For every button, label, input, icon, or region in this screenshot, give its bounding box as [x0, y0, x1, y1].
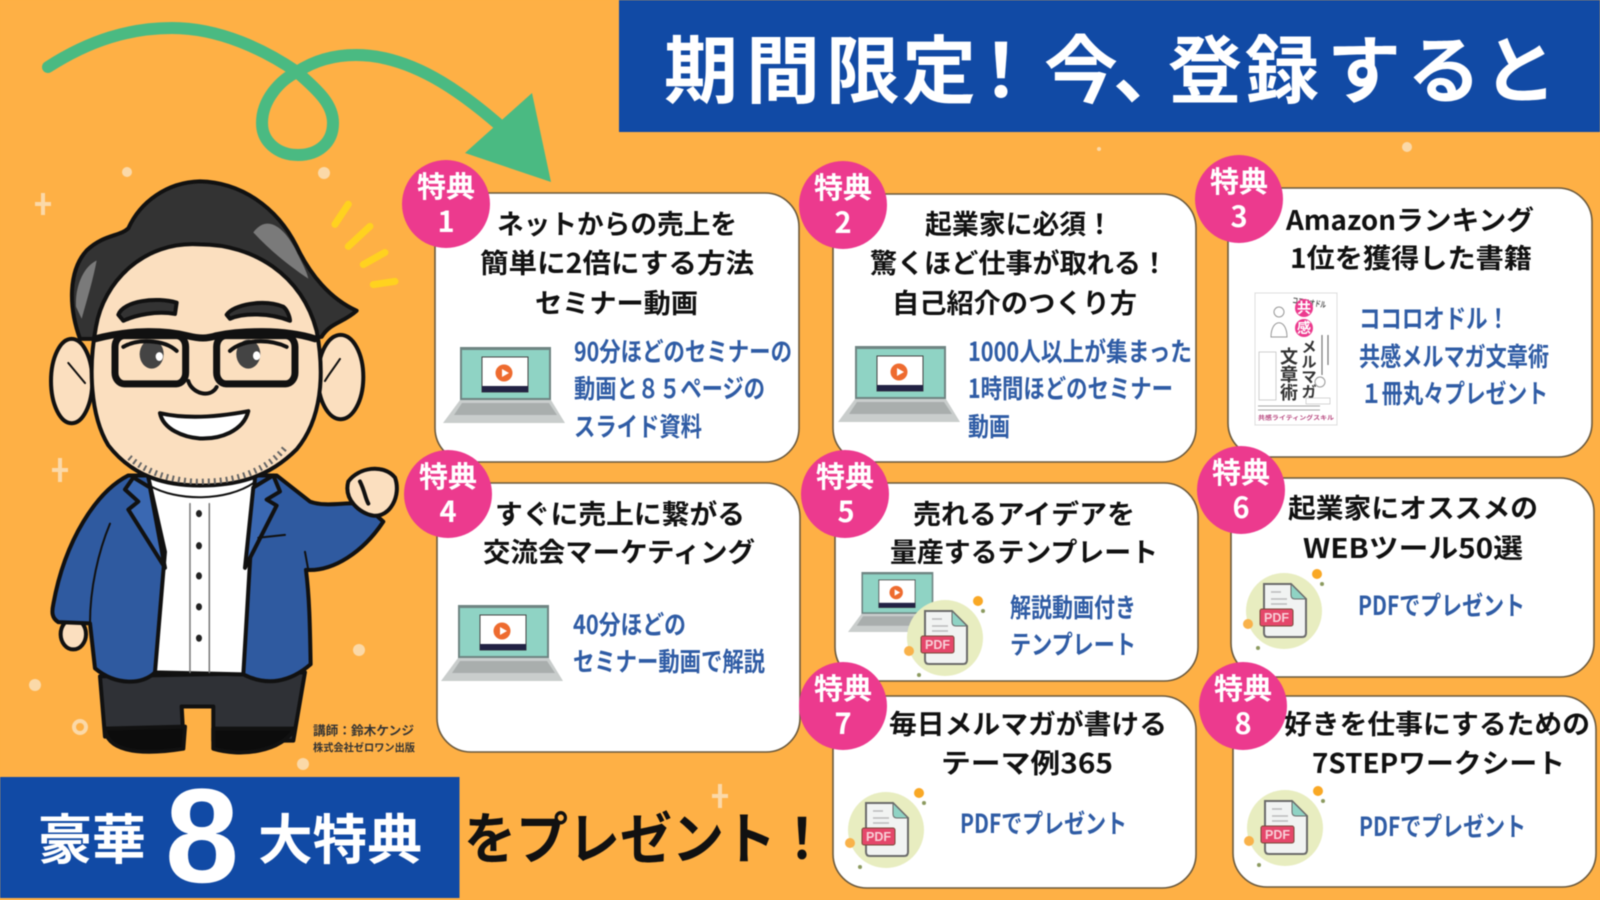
badge 2 — [799, 161, 887, 249]
description: 解説動画付き — [1010, 588, 1136, 625]
description: 1時間ほどのセミナー — [968, 369, 1173, 406]
badge 1 — [402, 160, 490, 248]
heading 8 — [1284, 703, 1590, 781]
heading 6: 起業家にオススメの — [1288, 487, 1538, 526]
heading 5: 売れるアイデアを — [913, 493, 1135, 532]
badge 6: 特典 — [1212, 450, 1270, 492]
badge 7 — [799, 662, 887, 750]
fist — [347, 469, 397, 516]
panel: 特典6 — [1231, 478, 1594, 677]
icon: PDF: PDF — [925, 638, 950, 652]
face — [92, 244, 321, 486]
badge 8 — [1199, 662, 1287, 750]
shirt — [148, 477, 255, 674]
heading 1 — [480, 203, 754, 321]
mouth — [160, 411, 248, 439]
left hand — [61, 619, 86, 649]
icon: PDF: PDF — [1265, 828, 1290, 842]
heading 2 — [870, 203, 1168, 321]
heading 2: 驚くほど仕事が取れる！ — [870, 242, 1168, 281]
description: 40分ほどの — [573, 605, 686, 642]
arrow: curly green arrow — [48, 28, 551, 182]
heading 8: 7STEPワークシート — [1312, 742, 1565, 781]
description: PDFでプレゼント — [960, 804, 1127, 841]
badge 3: 特典 — [1210, 159, 1268, 201]
glasses — [95, 332, 315, 384]
panel: 特典8 — [1233, 696, 1596, 887]
character illustration — [51, 181, 397, 752]
description: スライド資料 — [574, 407, 702, 444]
icon: PDF — [1244, 786, 1325, 867]
icon: laptop — [838, 346, 960, 422]
heading 1: ネットからの売上を — [497, 203, 737, 242]
book cover: ガ — [1301, 381, 1317, 402]
book cover: ル — [1301, 351, 1317, 372]
icon: laptop — [441, 605, 563, 681]
description: １冊丸々プレゼント — [1361, 374, 1548, 411]
badge 1: 1 — [437, 199, 455, 241]
heading 5 — [890, 493, 1158, 570]
badge 2: 特典 — [814, 165, 872, 207]
description: 動画 — [968, 407, 1010, 444]
instructor credit — [313, 720, 415, 755]
badge 4 — [404, 450, 492, 538]
badge 8: 特典 — [1214, 666, 1272, 708]
instructor credit: 講師：鈴木ケンジ — [313, 720, 414, 739]
hair highlights — [76, 224, 308, 319]
book cover: 文 — [1280, 343, 1298, 369]
background sparkles — [29, 142, 1412, 808]
badge 3 — [1195, 155, 1283, 243]
badge 2: 2 — [834, 200, 852, 242]
description: 1000人以上が集まった — [968, 332, 1192, 369]
icon: PDF: PDF — [866, 830, 891, 844]
heading 6: WEBツール50選 — [1303, 527, 1523, 566]
eyes — [123, 340, 287, 369]
book cover: ココロオドル — [1292, 295, 1327, 311]
badge 7: 7 — [834, 701, 852, 743]
badge 5 — [801, 450, 889, 538]
beard — [129, 447, 286, 482]
heading 2: 起業家に必須！ — [925, 203, 1113, 242]
description — [573, 605, 765, 679]
nose — [188, 381, 217, 394]
heading 4 — [483, 493, 755, 570]
heading 7: 毎日メルマガが書ける — [889, 703, 1167, 742]
book cover: 共 — [1297, 298, 1311, 318]
bottom band: 豪華8大特典: 大特典 — [258, 796, 422, 875]
badge 5: 5 — [837, 489, 855, 531]
instructor credit: 株式会社ゼロワン出版 — [313, 740, 415, 755]
heading 4: 交流会マーケティング — [483, 531, 755, 570]
book cover: 共感ライティングスキル — [1258, 413, 1334, 422]
badge 4: 特典 — [419, 454, 477, 496]
heading 7: テーマ例365 — [941, 742, 1113, 781]
badge 5: 特典 — [816, 454, 874, 496]
heading 4: すぐに売上に繋がる — [495, 493, 745, 532]
heading 3: 1位を獲得した書籍 — [1290, 237, 1532, 276]
badge 3: 3 — [1230, 194, 1248, 236]
badge 6: 6 — [1232, 485, 1250, 527]
icon: laptop — [443, 347, 565, 423]
description: セミナー動画で解説 — [573, 642, 765, 679]
icon: PDF — [845, 788, 926, 869]
book cover: 章 — [1280, 361, 1298, 387]
book cover: 術 — [1280, 379, 1298, 405]
description: 動画と８５ページの — [574, 369, 765, 406]
heading 5: 量産するテンプレート — [890, 531, 1158, 570]
badge 1: 特典 — [417, 164, 475, 206]
header band — [619, 0, 1600, 132]
heading 8: 好きを仕事にするための — [1284, 703, 1590, 742]
pants and shoes — [100, 672, 305, 752]
lapels — [125, 475, 280, 568]
description: PDFでプレゼント — [1359, 807, 1526, 844]
book cover: メ — [1301, 336, 1317, 357]
panel: 特典2 — [833, 194, 1196, 462]
description: 共感メルマガ文章術 — [1359, 337, 1549, 374]
heading 6 — [1288, 487, 1538, 566]
panel: 特典1 — [435, 193, 799, 462]
description: 90分ほどのセミナーの — [574, 332, 792, 369]
description — [1010, 588, 1136, 662]
bottom band: 豪華8大特典: 豪華 — [38, 796, 146, 875]
badge 4: 4 — [439, 489, 457, 531]
heading 2: 自己紹介のつくり方 — [892, 282, 1137, 321]
heading 7 — [889, 703, 1167, 781]
book cover: 感 — [1297, 318, 1311, 338]
description — [574, 332, 792, 444]
book cover — [1255, 293, 1337, 425]
icon: PDF: PDF — [1264, 611, 1289, 625]
hair — [72, 181, 357, 351]
panel: 特典3 — [1228, 188, 1592, 457]
bottom band: 豪華8大特典 — [0, 762, 460, 900]
icon: PDF — [1243, 569, 1324, 650]
panel: 特典5 — [835, 483, 1198, 681]
description: テンプレート — [1010, 625, 1136, 662]
book cover: マ — [1301, 366, 1317, 387]
icon: PDF — [904, 596, 985, 677]
panel: 特典7 — [833, 696, 1196, 888]
ears — [51, 335, 363, 423]
panel: 特典4 — [437, 483, 800, 752]
badge 8: 8 — [1234, 701, 1252, 743]
heading: をプレゼント！: をプレゼント！ — [464, 795, 828, 876]
badge 7: 特典 — [814, 666, 872, 708]
badge 6 — [1197, 446, 1285, 534]
title: 期間限定！今、登録すると — [664, 12, 1557, 119]
heading 1: セミナー動画 — [535, 282, 698, 321]
icon: laptop — [848, 572, 944, 632]
heading 1: 簡単に2倍にする方法 — [480, 242, 754, 281]
rays — [335, 204, 395, 285]
description: ココロオドル！ — [1359, 299, 1509, 336]
description — [968, 332, 1192, 444]
heading 3 — [1285, 199, 1534, 276]
eyebrows — [118, 300, 290, 321]
jacket — [52, 475, 383, 682]
heading 3: Amazonランキング — [1285, 199, 1534, 238]
description — [1359, 299, 1549, 411]
description: PDFでプレゼント — [1358, 586, 1525, 623]
